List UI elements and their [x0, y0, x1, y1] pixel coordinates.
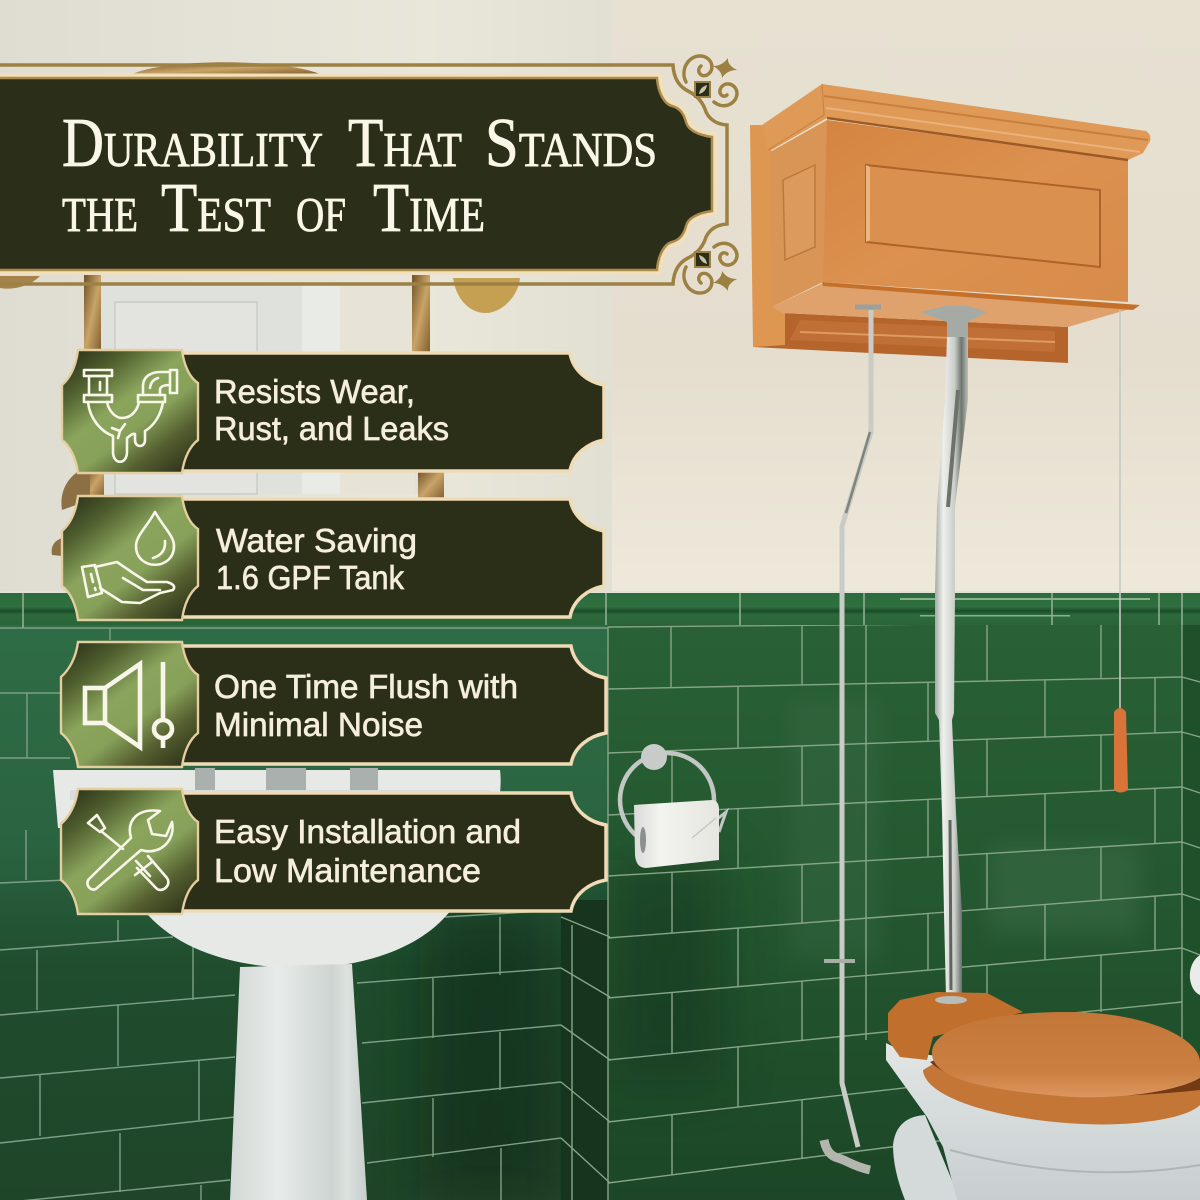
background: bathroom wall: [0, 0, 1200, 600]
tank front face: [823, 120, 1128, 302]
text plate: [170, 499, 604, 617]
bowl rim line: [950, 1150, 1200, 1172]
toilet with wooden seat: [886, 992, 1200, 1200]
icon: water drop over hand: [82, 512, 174, 603]
tank base lip: [822, 282, 1140, 310]
tank front panel: [866, 165, 1100, 267]
text plate: [170, 353, 604, 471]
icon plate: [62, 496, 198, 620]
label: Water Saving: [216, 522, 417, 559]
label: [216, 522, 417, 596]
pipe flange: [935, 996, 967, 1004]
title heading: Time: [373, 170, 485, 247]
background: mirror with gold frame: [0, 62, 520, 556]
pull chain and handle: [1114, 310, 1128, 792]
tank side face: [770, 120, 827, 307]
title heading: of: [296, 170, 346, 247]
title heading: Durability: [62, 105, 323, 182]
corner ornament: top right: [0, 56, 737, 293]
label: Rust, and Leaks: [214, 410, 449, 447]
dado trim: [0, 591, 1200, 628]
text plate: [170, 646, 606, 764]
icon plate: [61, 642, 198, 767]
pedestal sink: [53, 768, 501, 1200]
tank side panel: [783, 165, 815, 260]
label: Resists Wear,: [214, 373, 415, 410]
feature 3: minimal noise: [61, 642, 606, 767]
bowl: [886, 1043, 1200, 1200]
flush pipe: [920, 306, 987, 997]
rear wood pad: [888, 992, 1023, 1060]
background: green tiled wall, left: [0, 592, 612, 1200]
icon plate: [61, 789, 198, 914]
title plaque: [0, 78, 712, 270]
tank underside: [772, 283, 1133, 327]
feature 2: water saving: [62, 496, 604, 620]
feature 1: resists wear: [62, 350, 604, 473]
label: Easy Installation and: [214, 813, 521, 850]
tank cornice: [762, 84, 1150, 160]
seat ring: [923, 1060, 1200, 1124]
lid: [932, 1012, 1200, 1097]
icon: wrench and screwdriver: [87, 811, 173, 890]
tank lower trim: [753, 313, 1068, 363]
tank backboard: [750, 125, 785, 347]
drain pipe: [893, 1115, 960, 1200]
label: [214, 813, 521, 889]
title heading: That: [348, 105, 462, 182]
icon: leaking pipe: [84, 370, 177, 462]
title heading: Test: [161, 170, 271, 247]
label: [214, 373, 449, 447]
feature 4: easy installation: [61, 789, 606, 914]
wall fixture at right edge: [1190, 955, 1200, 995]
label: [214, 668, 518, 743]
wooden high tank: [750, 84, 1150, 363]
label: Low Maintenance: [214, 852, 481, 889]
label: 1.6 GPF Tank: [216, 559, 404, 596]
background: green tiled wall, right: [561, 592, 1200, 1200]
title heading: the: [62, 170, 138, 247]
icon: speaker with slider: [85, 662, 172, 748]
icon plate: [62, 350, 198, 473]
label: Minimal Noise: [214, 706, 423, 743]
flush lever rod: [824, 307, 881, 1170]
label: One Time Flush with: [214, 668, 518, 705]
title heading: Stands: [485, 105, 657, 182]
towel ring with toilet paper roll: [620, 744, 726, 868]
text plate: [170, 793, 606, 911]
